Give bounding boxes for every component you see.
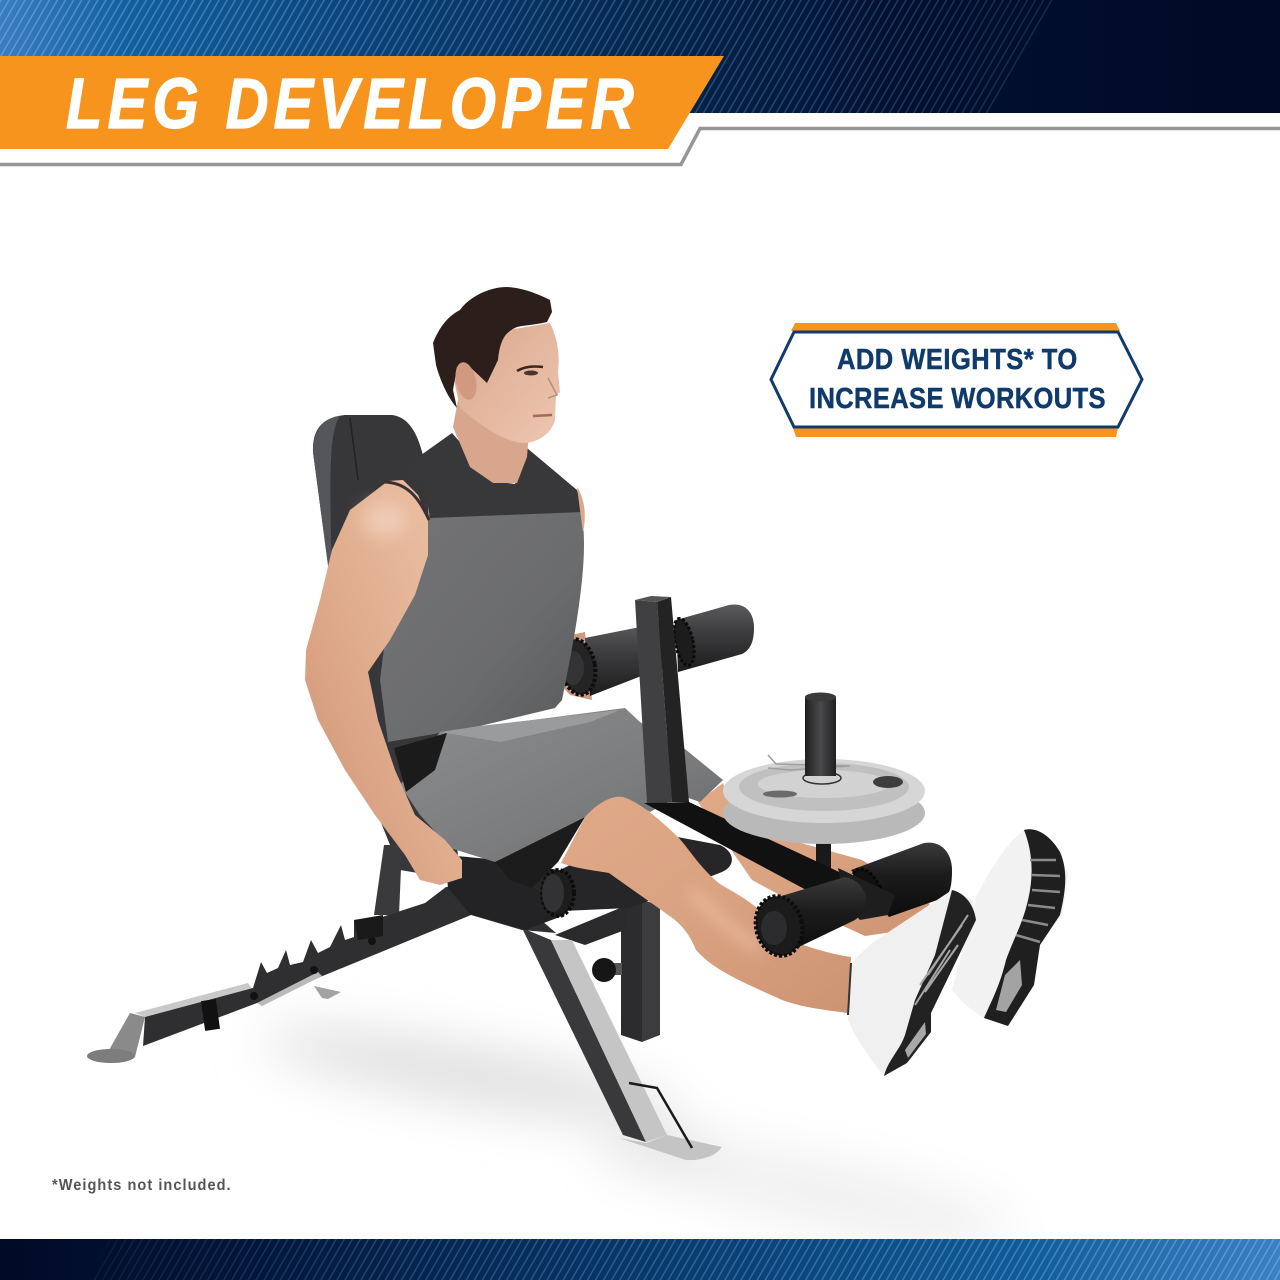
lower front roller <box>750 877 866 960</box>
header grey rule <box>0 128 1280 164</box>
bench photo illustration <box>87 287 1068 1160</box>
footnote: *Weights not included. <box>52 1177 231 1194</box>
callout: add weights: ADD WEIGHTS* TO <box>837 342 1077 375</box>
floor shadow <box>259 1013 1022 1264</box>
near arm <box>305 480 462 885</box>
title banner <box>0 56 724 149</box>
backrest pad <box>313 415 460 880</box>
far lower leg <box>698 783 930 936</box>
rear rail with notches <box>135 883 556 1046</box>
angled leg <box>522 928 722 1160</box>
ear <box>452 360 480 402</box>
callout: add weights: INCREASE WORKOUTS <box>809 381 1106 414</box>
callout: add weights <box>771 323 1142 437</box>
shorts <box>394 708 723 888</box>
far hand <box>556 632 592 700</box>
upper front roller <box>556 623 662 698</box>
hair <box>433 287 552 408</box>
title: LEG DEVELOPER <box>66 64 634 143</box>
head <box>433 287 560 443</box>
rear support strut <box>374 845 402 915</box>
neck <box>453 400 530 483</box>
facial features <box>517 366 557 416</box>
front foot plate <box>87 1013 145 1063</box>
leg developer column <box>635 596 689 803</box>
lower rear roller <box>846 843 952 920</box>
weight post <box>803 692 841 784</box>
under-seat frame block <box>445 855 565 930</box>
footer band <box>0 1239 1280 1280</box>
adjustment knob <box>592 958 622 982</box>
torso shirt <box>380 433 585 742</box>
upper rear roller <box>670 604 754 672</box>
weight post lower shaft <box>816 838 831 872</box>
weight plates <box>723 755 925 844</box>
near leg <box>561 797 851 1013</box>
hip knurled knob <box>542 870 574 916</box>
front support post <box>555 900 660 1042</box>
leg developer bar <box>644 802 875 905</box>
near shoe <box>848 890 976 1076</box>
seat pad <box>440 830 732 912</box>
rear foot <box>314 986 341 999</box>
roller crossbar <box>838 868 895 920</box>
far shoe <box>952 829 1068 1026</box>
header band <box>0 0 1280 113</box>
